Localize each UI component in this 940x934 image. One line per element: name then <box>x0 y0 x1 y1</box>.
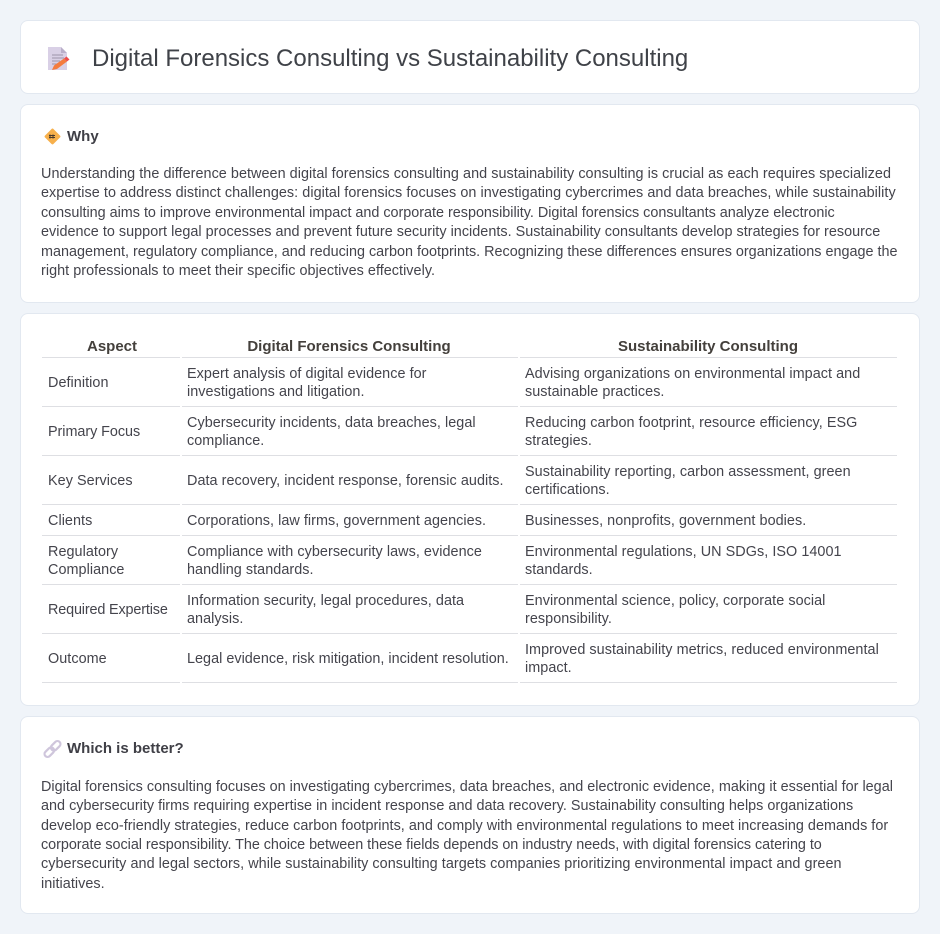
row: clients: Clients <box>48 513 92 529</box>
row: regulatory compliance: Environmental regulations, UN SDGs, ISO 14001 <box>525 544 842 560</box>
text block: why: consulting aims to improve environmental impact and corporate responsibility. Digital forensics consultants analyze electronic <box>41 205 835 221</box>
title: Digital Forensics Consulting vs Sustainability Consulting <box>92 45 688 72</box>
row: outcome: Outcome <box>48 651 107 667</box>
row: regulatory compliance: handling standards. <box>187 562 314 578</box>
row: primary focus: Reducing carbon footprint, resource efficiency, ESG <box>525 415 857 431</box>
panel: why <box>20 104 920 303</box>
row: required expertise: Environmental science, policy, corporate social <box>525 593 825 609</box>
text block: which is better: Digital forensics consulting focuses on investigating cybercrimes, data breaches, and electronic evidence, making it essential for legal <box>41 779 893 795</box>
row: clients: Businesses, nonprofits, government bodies. <box>525 513 806 529</box>
row: definition <box>48 366 860 400</box>
icon: document with pencil <box>48 47 70 70</box>
row: regulatory compliance: standards. <box>525 562 593 578</box>
row: regulatory compliance: Compliance with cybersecurity laws, evidence <box>187 544 482 560</box>
text block: which is better <box>41 779 893 892</box>
row: outcome <box>48 642 879 676</box>
row: primary focus: compliance. <box>187 433 264 449</box>
row: clients <box>48 513 806 529</box>
row: definition: investigations and litigation. <box>187 384 364 400</box>
row: required expertise: analysis. <box>187 611 243 627</box>
row: key services <box>48 464 851 498</box>
row: regulatory compliance: Regulatory <box>48 544 118 560</box>
table header: Digital Forensics Consulting <box>247 338 451 355</box>
row: regulatory compliance: Compliance <box>48 562 124 578</box>
text block: why: evidence to support legal processes and prevent future security incidents. Sustainability consultants develop strategies for resource <box>41 224 880 240</box>
text block: which is better: cybersecurity and legal sectors, while sustainability consulting targets companies prioritizing environmental impact and green <box>41 856 842 872</box>
text block: which is better: initiatives. <box>41 876 105 892</box>
icon: chain link <box>44 740 62 758</box>
row: required expertise <box>48 593 825 627</box>
row: key services: Key Services <box>48 473 133 489</box>
row: required expertise: Required Expertise <box>48 602 168 618</box>
row: outcome: Legal evidence, risk mitigation, incident resolution. <box>187 651 509 667</box>
row: primary focus: strategies. <box>525 433 592 449</box>
row: required expertise: Information security, legal procedures, data <box>187 593 464 609</box>
row: outcome: impact. <box>525 660 572 676</box>
icon: warning diamond <box>44 128 60 144</box>
text block: why <box>41 166 898 279</box>
row: required expertise: responsibility. <box>525 611 612 627</box>
text block: which is better: corporate social responsibility. The choice between these fields depends on industry needs, with digital forensics catering to <box>41 837 822 853</box>
row: definition: Advising organizations on environmental impact and <box>525 366 860 382</box>
heading: why: Why <box>67 128 99 145</box>
text block: which is better: and cybersecurity firms requiring expertise in incident response and data recovery. Sustainability consulting helps organizations <box>41 798 853 814</box>
row: primary focus <box>48 415 857 449</box>
text block: which is better: develop eco-friendly strategies, reduce carbon footprints, and comply with environmental regulations to meet increasing demands for <box>41 818 888 834</box>
row: key services: Sustainability reporting, carbon assessment, green <box>525 464 851 480</box>
row: definition: Expert analysis of digital evidence for <box>187 366 427 382</box>
row: definition: sustainable practices. <box>525 384 664 400</box>
text block: why: management, regulatory compliance, and reducing carbon footprints. Recognizing these differences ensures organizations engage the <box>41 244 898 260</box>
row: primary focus: Primary Focus <box>48 424 140 440</box>
heading: which is better: Which is better? <box>67 740 184 757</box>
table header: Aspect <box>87 338 137 355</box>
table header <box>87 338 798 355</box>
text block: why: Understanding the difference between digital forensics consulting and sustainability consulting is crucial as each requires specialized <box>41 166 891 182</box>
row: outcome: Improved sustainability metrics, reduced environmental <box>525 642 879 658</box>
row: primary focus: Cybersecurity incidents, data breaches, legal <box>187 415 476 431</box>
row: definition: Definition <box>48 375 108 391</box>
row: clients: Corporations, law firms, government agencies. <box>187 513 486 529</box>
table header: Sustainability Consulting <box>618 338 798 355</box>
text block: why: expertise to address distinct challenges: digital forensics focuses on investigating cybercrimes and data breaches, while sustainability <box>41 185 896 201</box>
panel: comparison table <box>20 313 920 706</box>
row: key services: certifications. <box>525 482 610 498</box>
panel: header <box>20 20 920 94</box>
row: key services: Data recovery, incident response, forensic audits. <box>187 473 504 489</box>
row: regulatory compliance <box>48 544 842 578</box>
text block: why: right professionals to meet their specific objectives effectively. <box>41 263 435 279</box>
panel: which is better <box>20 716 920 914</box>
